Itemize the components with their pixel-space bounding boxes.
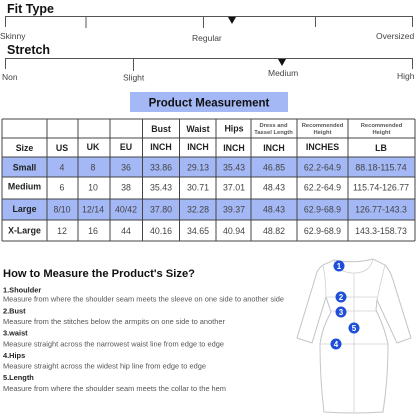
row: Small: Small — [13, 162, 36, 172]
title banner — [130, 92, 288, 112]
row: Large: 39.37 — [223, 204, 245, 214]
row: X-Large: 48.82 — [263, 226, 285, 236]
marker 2 — [336, 292, 346, 302]
dress outline — [297, 259, 411, 413]
measuring instructions: Measure straight across the widest hip line from edge to edge — [3, 362, 206, 370]
row: X-Large: 40.16 — [150, 226, 172, 236]
row: Large: 48.43 — [263, 204, 285, 214]
row: X-Large: 34.65 — [187, 226, 209, 236]
row: Small: 62.2-64.9 — [304, 162, 341, 172]
row: Medium: 37.01 — [223, 182, 245, 192]
row: Medium: Medium — [8, 182, 41, 192]
marker 4 — [330, 338, 342, 350]
header row 2 — [16, 142, 387, 153]
header row 2: Size — [16, 143, 33, 153]
measuring instructions: Measure from the stitches below the armpits on one side to another — [3, 317, 226, 326]
row: X-Large: 44 — [121, 226, 131, 236]
row: Large: 12/14 — [82, 204, 104, 214]
row: Large: 40/42 — [115, 204, 137, 214]
row: Medium: 48.43 — [263, 182, 285, 192]
fit type labels: Skinny — [0, 31, 26, 41]
heading: Fit Type: Fit Type — [7, 2, 54, 16]
seams and measure lines — [320, 259, 388, 412]
row: X-Large — [8, 226, 407, 236]
table grid — [2, 119, 415, 241]
measuring instructions: 1.Shoulder — [3, 286, 41, 294]
stretch labels: Medium — [268, 68, 298, 78]
measuring instructions: 5.Length — [3, 373, 34, 382]
row: Medium: 10 — [88, 182, 98, 192]
row: Medium: 62.2-64.9 — [304, 182, 341, 192]
marker 4: 4 — [334, 340, 339, 349]
row: Medium: 30.71 — [187, 182, 209, 192]
marker 2: 2 — [339, 293, 344, 302]
header row 1: Hips — [224, 124, 244, 134]
marker 1 — [334, 260, 344, 272]
row: Small: 88.18-115.74 — [355, 162, 407, 172]
measuring instructions — [3, 286, 284, 393]
header row 2: INCH — [150, 142, 172, 152]
header row 1: Tassel Length — [254, 130, 293, 136]
header row 2: EU — [120, 142, 132, 152]
marker 1: 1 — [337, 262, 342, 271]
measuring instructions: Measure straight across the narrowest waist line from edge to edge — [3, 340, 224, 348]
measuring instructions: 4.Hips — [3, 351, 25, 360]
row: Small: 46.85 — [263, 162, 285, 172]
header row 1: Height — [372, 130, 391, 136]
row: Small: 29.13 — [187, 162, 209, 172]
header row 1: Bust — [151, 124, 171, 134]
stretch labels: Non — [2, 72, 18, 82]
header row 1: Height — [313, 130, 332, 136]
marker 5: 5 — [352, 324, 357, 333]
row: Medium: 115.74-126.77 — [353, 182, 409, 192]
marker 3 — [336, 306, 346, 318]
header row 1: Waist — [186, 124, 210, 134]
marker 3: 3 — [339, 308, 344, 317]
stretch labels — [2, 68, 415, 82]
fit type scale — [0, 2, 415, 43]
measuring instructions: Measure from where the shoulder seam meets the collar to the hem — [3, 384, 226, 393]
row: Large: 37.80 — [150, 204, 172, 214]
row: Small: 36 — [121, 162, 131, 172]
row: X-Large: 12 — [57, 226, 67, 236]
dress diagram — [297, 259, 411, 413]
stretch labels: Slight — [123, 72, 145, 82]
row: Small: 8 — [91, 162, 96, 172]
row: X-Large: 62.9-68.9 — [304, 226, 341, 236]
header row 2: US — [56, 143, 68, 153]
header row 2: UK — [87, 142, 100, 152]
measuring instructions: 2.Bust — [3, 306, 26, 316]
header row 2: INCH — [263, 143, 285, 153]
marker 5 — [348, 322, 360, 334]
row: Small: 33.86 — [150, 162, 172, 172]
row: X-Large: X-Large — [8, 226, 41, 236]
row: Large: 8/10 — [53, 204, 71, 214]
row: Medium: 35.43 — [150, 182, 172, 192]
row: X-Large: 16 — [88, 226, 98, 236]
fit type labels: Regular — [192, 33, 222, 43]
header row 2: LB — [375, 143, 387, 153]
heading: Stretch: Stretch — [7, 43, 50, 57]
how to measure heading: How to Measure the Product's Size? — [3, 268, 195, 280]
header row 1 — [151, 123, 403, 136]
row: Medium: 6 — [60, 182, 65, 192]
stretch scale — [2, 43, 415, 82]
stretch labels: High — [397, 71, 415, 81]
stretch marker — [278, 59, 286, 66]
row: Large: 62.9-68.9 — [304, 204, 341, 214]
header row 1: Recommended — [361, 123, 403, 129]
size table — [2, 119, 415, 241]
row: Large: 126.77-143.3 — [355, 204, 407, 214]
header row 2: INCH — [187, 142, 209, 152]
header row 1: Dress and — [259, 123, 288, 129]
row: X-Large: 40.94 — [223, 226, 245, 236]
row: X-Large: 143.3-158.73 — [355, 226, 407, 236]
row: Large — [13, 204, 407, 214]
fit type marker — [228, 17, 236, 24]
measuring instructions: 3.waist — [3, 328, 28, 338]
row: Medium — [8, 182, 409, 192]
row: Medium: 38 — [121, 182, 131, 192]
highlighted rows — [2, 157, 415, 177]
measuring instructions: Measure from where the shoulder seam meets the sleeve on one side to another side — [3, 294, 284, 304]
row: Small — [13, 162, 407, 172]
row: Large: 32.28 — [187, 204, 209, 214]
header row 2: INCH — [223, 143, 245, 153]
header row 2: INCHES — [306, 142, 339, 152]
fit type ruler — [5, 16, 413, 28]
fit type labels: Oversized — [376, 31, 415, 41]
fit type labels — [0, 31, 415, 43]
stretch ruler — [5, 58, 413, 71]
title banner: Product Measurement — [149, 98, 270, 110]
row: Large: Large — [13, 204, 37, 214]
header row 1: Recommended — [302, 123, 344, 129]
row: Small: 4 — [60, 162, 65, 172]
row: Small: 35.43 — [223, 162, 245, 172]
